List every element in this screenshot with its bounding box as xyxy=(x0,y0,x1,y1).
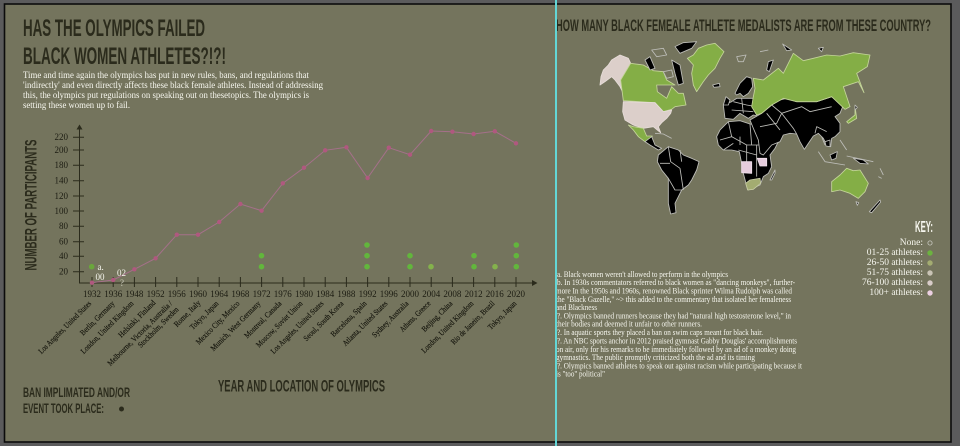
map key: 26-50 athletes: xyxy=(867,258,923,268)
host city labels: Beijing, China xyxy=(420,299,455,334)
x axis year labels: 1976 xyxy=(274,289,292,299)
host city labels: Los Angeles, United States xyxy=(37,299,93,356)
y axis labels: 80 xyxy=(59,221,68,231)
cyan guide line xyxy=(555,0,557,446)
map: Russia, Asia, Australia xyxy=(750,44,883,213)
intro text block: 'indirectly' and even directly affects these black female athletes. Instead of addressing xyxy=(23,80,323,91)
x axis year labels: 2004 xyxy=(422,289,441,299)
x axis year labels: 1960 xyxy=(189,289,208,299)
host city labels: Tokyo, Japan xyxy=(188,299,220,332)
host city labels: Los Angeles, United States xyxy=(269,299,325,356)
chart footnote markers xyxy=(96,262,126,288)
x axis year labels: 1964 xyxy=(210,289,229,299)
ban legend: BAN IMPLIMATED AND/OR xyxy=(23,384,130,400)
green ban markers xyxy=(89,242,519,270)
x axis year labels: 1980 xyxy=(295,289,314,299)
y axis title: NUMBER OF PARTICIPANTS xyxy=(22,140,40,270)
map: Americas, Africa, Europe xyxy=(600,42,778,214)
host city labels xyxy=(37,298,518,368)
host city labels: Helsinki, Finland xyxy=(116,298,157,339)
y axis labels: 100 xyxy=(54,206,68,216)
host city labels: Rio de Janeiro, Brazil xyxy=(449,299,497,346)
footnotes text block: ?. Olympics banned runners because they had "natural high testosterone level," in xyxy=(557,312,792,320)
host city labels: Tokyo, Japan xyxy=(486,299,518,332)
footnotes text block: ?. In aquatic sports they placed a ban on swim caps meant for black hair. xyxy=(557,328,763,337)
x axis year labels: 2016 xyxy=(486,289,504,299)
host city labels: Mexico City, Mexico xyxy=(194,299,241,346)
footnotes text block: ?. Olympics banned athletes to speak out against racism while participating because it xyxy=(557,362,803,370)
host city labels: Rome, Italy xyxy=(172,298,202,329)
participants line xyxy=(92,131,516,283)
chart footnote markers: 00 xyxy=(96,272,105,282)
chart axes xyxy=(73,128,535,287)
footnotes text block: the "Black Gazelle," ~> this added to the commentary that isolated her femaleness xyxy=(556,295,791,304)
y axis labels: 200 xyxy=(54,145,68,155)
host city labels: Montreal, Canada xyxy=(242,299,284,340)
footnotes text block: b. In 1930s commentators referred to black women as "dancing monkeys", further- xyxy=(557,278,795,287)
x axis year labels: 1932 xyxy=(83,289,101,299)
title: BLACK WOMEN ATHLETES?!?! xyxy=(23,43,226,70)
x axis year labels: 2000 xyxy=(401,289,420,299)
host city labels: Melbourne, Victoria, Australia / xyxy=(106,299,175,368)
host city labels: Atlanta, United States xyxy=(341,299,389,348)
y axis labels: 220 xyxy=(54,132,68,142)
y axis labels xyxy=(54,132,68,276)
chart footnote markers: ? xyxy=(120,278,124,288)
footnotes text block: a. Black women weren't allowed to perform in the olympics xyxy=(557,270,728,279)
host city labels: London, United Kingdom xyxy=(79,299,136,356)
map key: 100+ athletes: xyxy=(869,288,923,298)
x axis year labels: 1956 xyxy=(168,289,186,299)
world map xyxy=(600,42,883,214)
footnotes text block: more In the 1950s and 1960s, renowned Black sprinter Wilma Rudolph was called xyxy=(556,286,793,295)
x axis title: YEAR AND LOCATION OF OLYMPICS xyxy=(218,376,385,396)
x axis year labels: 1948 xyxy=(125,289,144,299)
y axis labels: 40 xyxy=(59,251,68,261)
x axis year labels: 1988 xyxy=(337,289,356,299)
footnotes text block: and Blackness xyxy=(556,303,597,312)
intro text block xyxy=(23,71,323,111)
footnotes text block: ?. An NBC sports anchor in 2012 praised gymnast Gabby Douglas' accomplishments xyxy=(557,336,797,346)
map key xyxy=(862,219,933,298)
map key: 76-100 athletes: xyxy=(862,278,923,288)
host city labels: Athens, Greece xyxy=(398,299,433,334)
intro text block: setting these women up to fail. xyxy=(23,100,130,111)
participants markers xyxy=(90,129,518,285)
host city labels: Sydney, Australia xyxy=(370,299,411,339)
x axis year labels: 1972 xyxy=(253,289,271,299)
chart footnote markers: 02 xyxy=(117,268,126,278)
host city labels: Berlin, Germany xyxy=(78,299,116,337)
x axis year labels: 1992 xyxy=(359,289,377,299)
text: KEY: xyxy=(915,219,933,236)
ban legend: EVENT TOOK PLACE: xyxy=(23,400,104,416)
chart footnote markers: a. xyxy=(98,262,104,272)
y axis labels: 140 xyxy=(54,176,68,186)
x axis year labels: 1996 xyxy=(380,289,398,299)
x axis year labels xyxy=(83,289,526,299)
footnotes text block xyxy=(556,270,803,378)
footnotes text block: their bodies and deemed it unfair to other runners. xyxy=(556,320,702,328)
y axis labels: 180 xyxy=(54,160,68,170)
host city labels: Seoul, South Korea xyxy=(302,299,346,343)
host city labels: Munich, West Germany xyxy=(209,299,262,353)
map key: 51-75 athletes: xyxy=(867,268,923,278)
x axis year labels: 2012 xyxy=(465,289,483,299)
x axis year labels: 1968 xyxy=(231,289,250,299)
x axis year labels: 1936 xyxy=(104,289,123,299)
footnotes text block: is "too" political" xyxy=(556,370,605,378)
ban legend xyxy=(23,384,130,416)
intro text block: this, the olympics put regulations on speaking out on thesetopics. The olympics is xyxy=(23,91,309,101)
host city labels: Moscow, Soviet Union xyxy=(254,299,304,349)
x axis year labels: 2020 xyxy=(507,289,526,299)
host city labels: Barcelona, Spain xyxy=(329,299,368,339)
title xyxy=(23,15,226,70)
line chart: participants by year xyxy=(54,124,538,299)
footnotes text block: gymnastics. The public promptly criticized both the ad and its timing xyxy=(556,353,756,362)
x axis year labels: 1984 xyxy=(316,289,335,299)
map key: 01-25 athletes: xyxy=(867,248,923,258)
host city labels: London, United Kingdom xyxy=(420,299,476,355)
map key: None: xyxy=(900,238,923,248)
y axis labels: 120 xyxy=(54,191,68,201)
y axis labels: 60 xyxy=(59,236,68,246)
y axis labels: 20 xyxy=(59,266,68,276)
x axis year labels: 2008 xyxy=(443,289,462,299)
title: HAS THE OLYMPICS FAILED xyxy=(23,15,205,42)
host city labels: Stockholm, Sweden xyxy=(136,305,180,350)
footnotes text block: on air, only for his remarks to be immediately followed by an ad of a monkey doing xyxy=(556,345,797,354)
x axis year labels: 1952 xyxy=(147,289,165,299)
intro text block: Time and time again the olympics has put in new rules, bans, and regulations that xyxy=(23,71,309,81)
